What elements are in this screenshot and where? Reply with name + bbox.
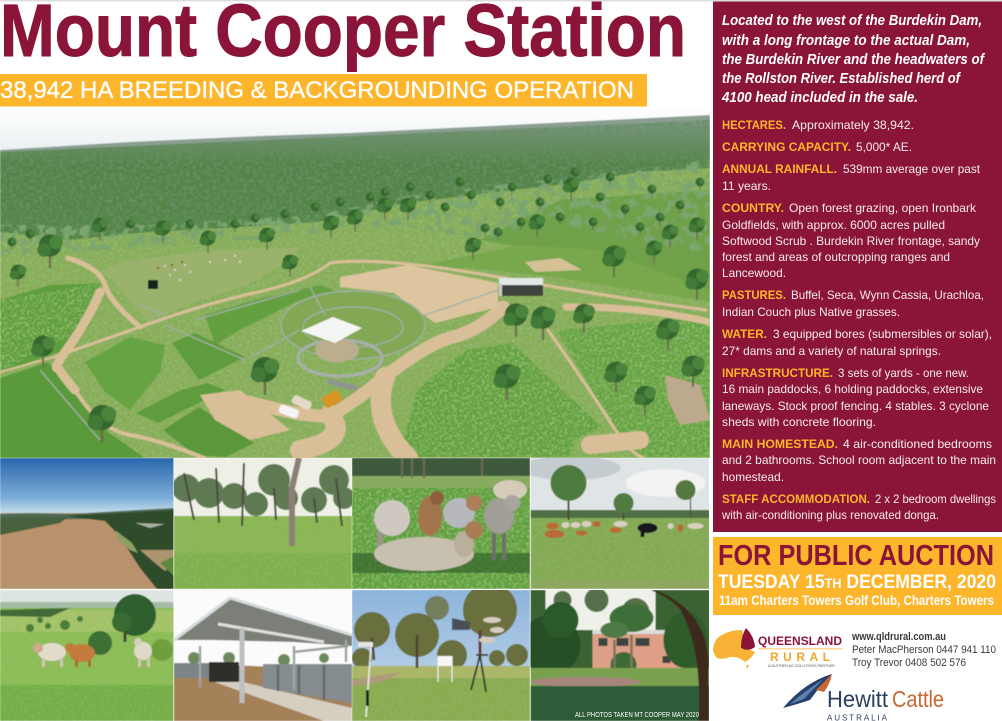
intro paragraph: the Burdekin River and the headwaters of <box>722 52 986 68</box>
country: forest and areas of outcropping ranges and <box>722 250 950 264</box>
main homestead: MAIN HOMESTEAD. <box>722 437 838 451</box>
photo: windmill and signs <box>352 590 530 721</box>
photo: Brahman cattle in paddock <box>352 458 530 589</box>
main homestead: and 2 bathrooms. School room adjacent to the main <box>722 453 996 467</box>
infrastructure: 16 main paddocks, 6 holding paddocks, extensive <box>722 382 983 396</box>
infrastructure <box>722 366 989 429</box>
pastures: Indian Couch plus Native grasses. <box>722 305 900 319</box>
panel: property details <box>713 2 1002 532</box>
machinery shed <box>499 278 543 285</box>
main homestead: homestead. <box>722 470 784 484</box>
staff accommodation: 2 x 2 bedroom dwellings <box>875 492 996 506</box>
intro paragraph <box>721 13 986 106</box>
photo: covered cattle yards <box>174 596 352 721</box>
annual rainfall <box>722 162 981 193</box>
subtitle banner: 38,942 HA BREEDING & BACKGROUNDING OPERATION <box>0 77 634 104</box>
logo: Queensland Rural: RURAL <box>770 650 830 664</box>
vehicles <box>278 404 300 419</box>
carrying capacity: CARRYING CAPACITY. <box>722 140 851 154</box>
photo credit caption: ALL PHOTOS TAKEN MT COOPER MAY 2020 <box>575 712 699 719</box>
panel: auction details <box>713 537 1002 615</box>
grazing cattle <box>164 255 241 281</box>
staff accommodation: STAFF ACCOMMODATION. <box>722 492 870 506</box>
logo: Hewitt Cattle Australia <box>783 674 944 721</box>
water: 27* dams and a variety of natural springs. <box>722 344 941 358</box>
intro paragraph: 4100 head included in the sale. <box>721 90 918 106</box>
country <box>722 201 980 280</box>
contact details <box>851 631 996 669</box>
pastures: Buffel, Seca, Wynn Cassia, Urachloa, <box>791 288 984 302</box>
staff accommodation: with air-conditioning plus renovated donga. <box>721 508 939 522</box>
intro paragraph: with a long frontage to the actual Dam, <box>722 33 970 49</box>
infrastructure: laneways. Stock proof fencing. 4 stables. 3 cyclone <box>722 399 989 413</box>
photo: cattle under pasture tree <box>0 590 174 721</box>
carrying capacity: 5,000* AE. <box>856 140 912 154</box>
country: COUNTRY. <box>722 201 784 215</box>
pastures: PASTURES. <box>722 288 786 302</box>
contact details: www.qldrural.com.au <box>851 631 946 643</box>
forest-edge trees <box>508 182 516 195</box>
staff accommodation <box>721 492 996 522</box>
annual rainfall: 11 years. <box>722 179 771 193</box>
main homestead <box>722 437 996 484</box>
annual rainfall: ANNUAL RAINFALL. <box>722 162 837 176</box>
contact details: Troy Trevor 0408 502 576 <box>852 657 966 669</box>
hero aerial photo of cattle yards and forest <box>0 114 710 458</box>
carrying capacity <box>722 140 912 154</box>
logo: Queensland Rural: A NUTRIEN AG SOLUTIONS PARTNER <box>768 663 835 668</box>
country: Open forest grazing, open Ironbark <box>789 201 977 215</box>
intro paragraph: Located to the west of the Burdekin Dam, <box>722 13 982 29</box>
country: Softwood Scrub . Burdekin River frontage, sandy <box>722 234 980 248</box>
water: WATER. <box>722 327 767 341</box>
photo: main homestead <box>530 590 709 721</box>
annual rainfall: 539mm average over past <box>843 162 981 176</box>
hectares: Approximately 38,942. <box>792 118 914 132</box>
water <box>722 327 992 358</box>
country: Lancewood. <box>722 266 786 280</box>
photo: open forest grazing <box>174 458 352 589</box>
country: Goldfields, with approx. 6000 acres pulled <box>722 218 945 232</box>
forest thinning into pasture <box>0 160 710 255</box>
water: 3 equipped bores (submersibles or solar), <box>773 327 992 341</box>
logo: Queensland Rural <box>713 628 842 669</box>
pastures <box>722 288 984 319</box>
infrastructure: sheds with concrete flooring. <box>722 415 876 429</box>
roof over yards <box>301 317 362 343</box>
photo: herd and trees <box>530 458 709 589</box>
intro paragraph: the Rollston River. Established herd of <box>722 71 962 87</box>
infrastructure: INFRASTRUCTURE. <box>722 366 833 380</box>
logo: Queensland Rural: QUEENSLAND <box>758 634 842 648</box>
sandy tracks <box>0 258 710 458</box>
cattle yards <box>281 291 425 359</box>
hectares: HECTARES. <box>722 118 786 132</box>
logo: Hewitt Cattle Australia: Hewitt <box>827 686 889 712</box>
hectares <box>722 118 914 132</box>
infrastructure: 3 sets of yards - one new. <box>838 366 969 380</box>
photo: Burdekin River <box>0 458 174 589</box>
main homestead: 4 air-conditioned bedrooms <box>843 437 992 451</box>
logo: Hewitt Cattle Australia: Cattle <box>892 686 944 712</box>
